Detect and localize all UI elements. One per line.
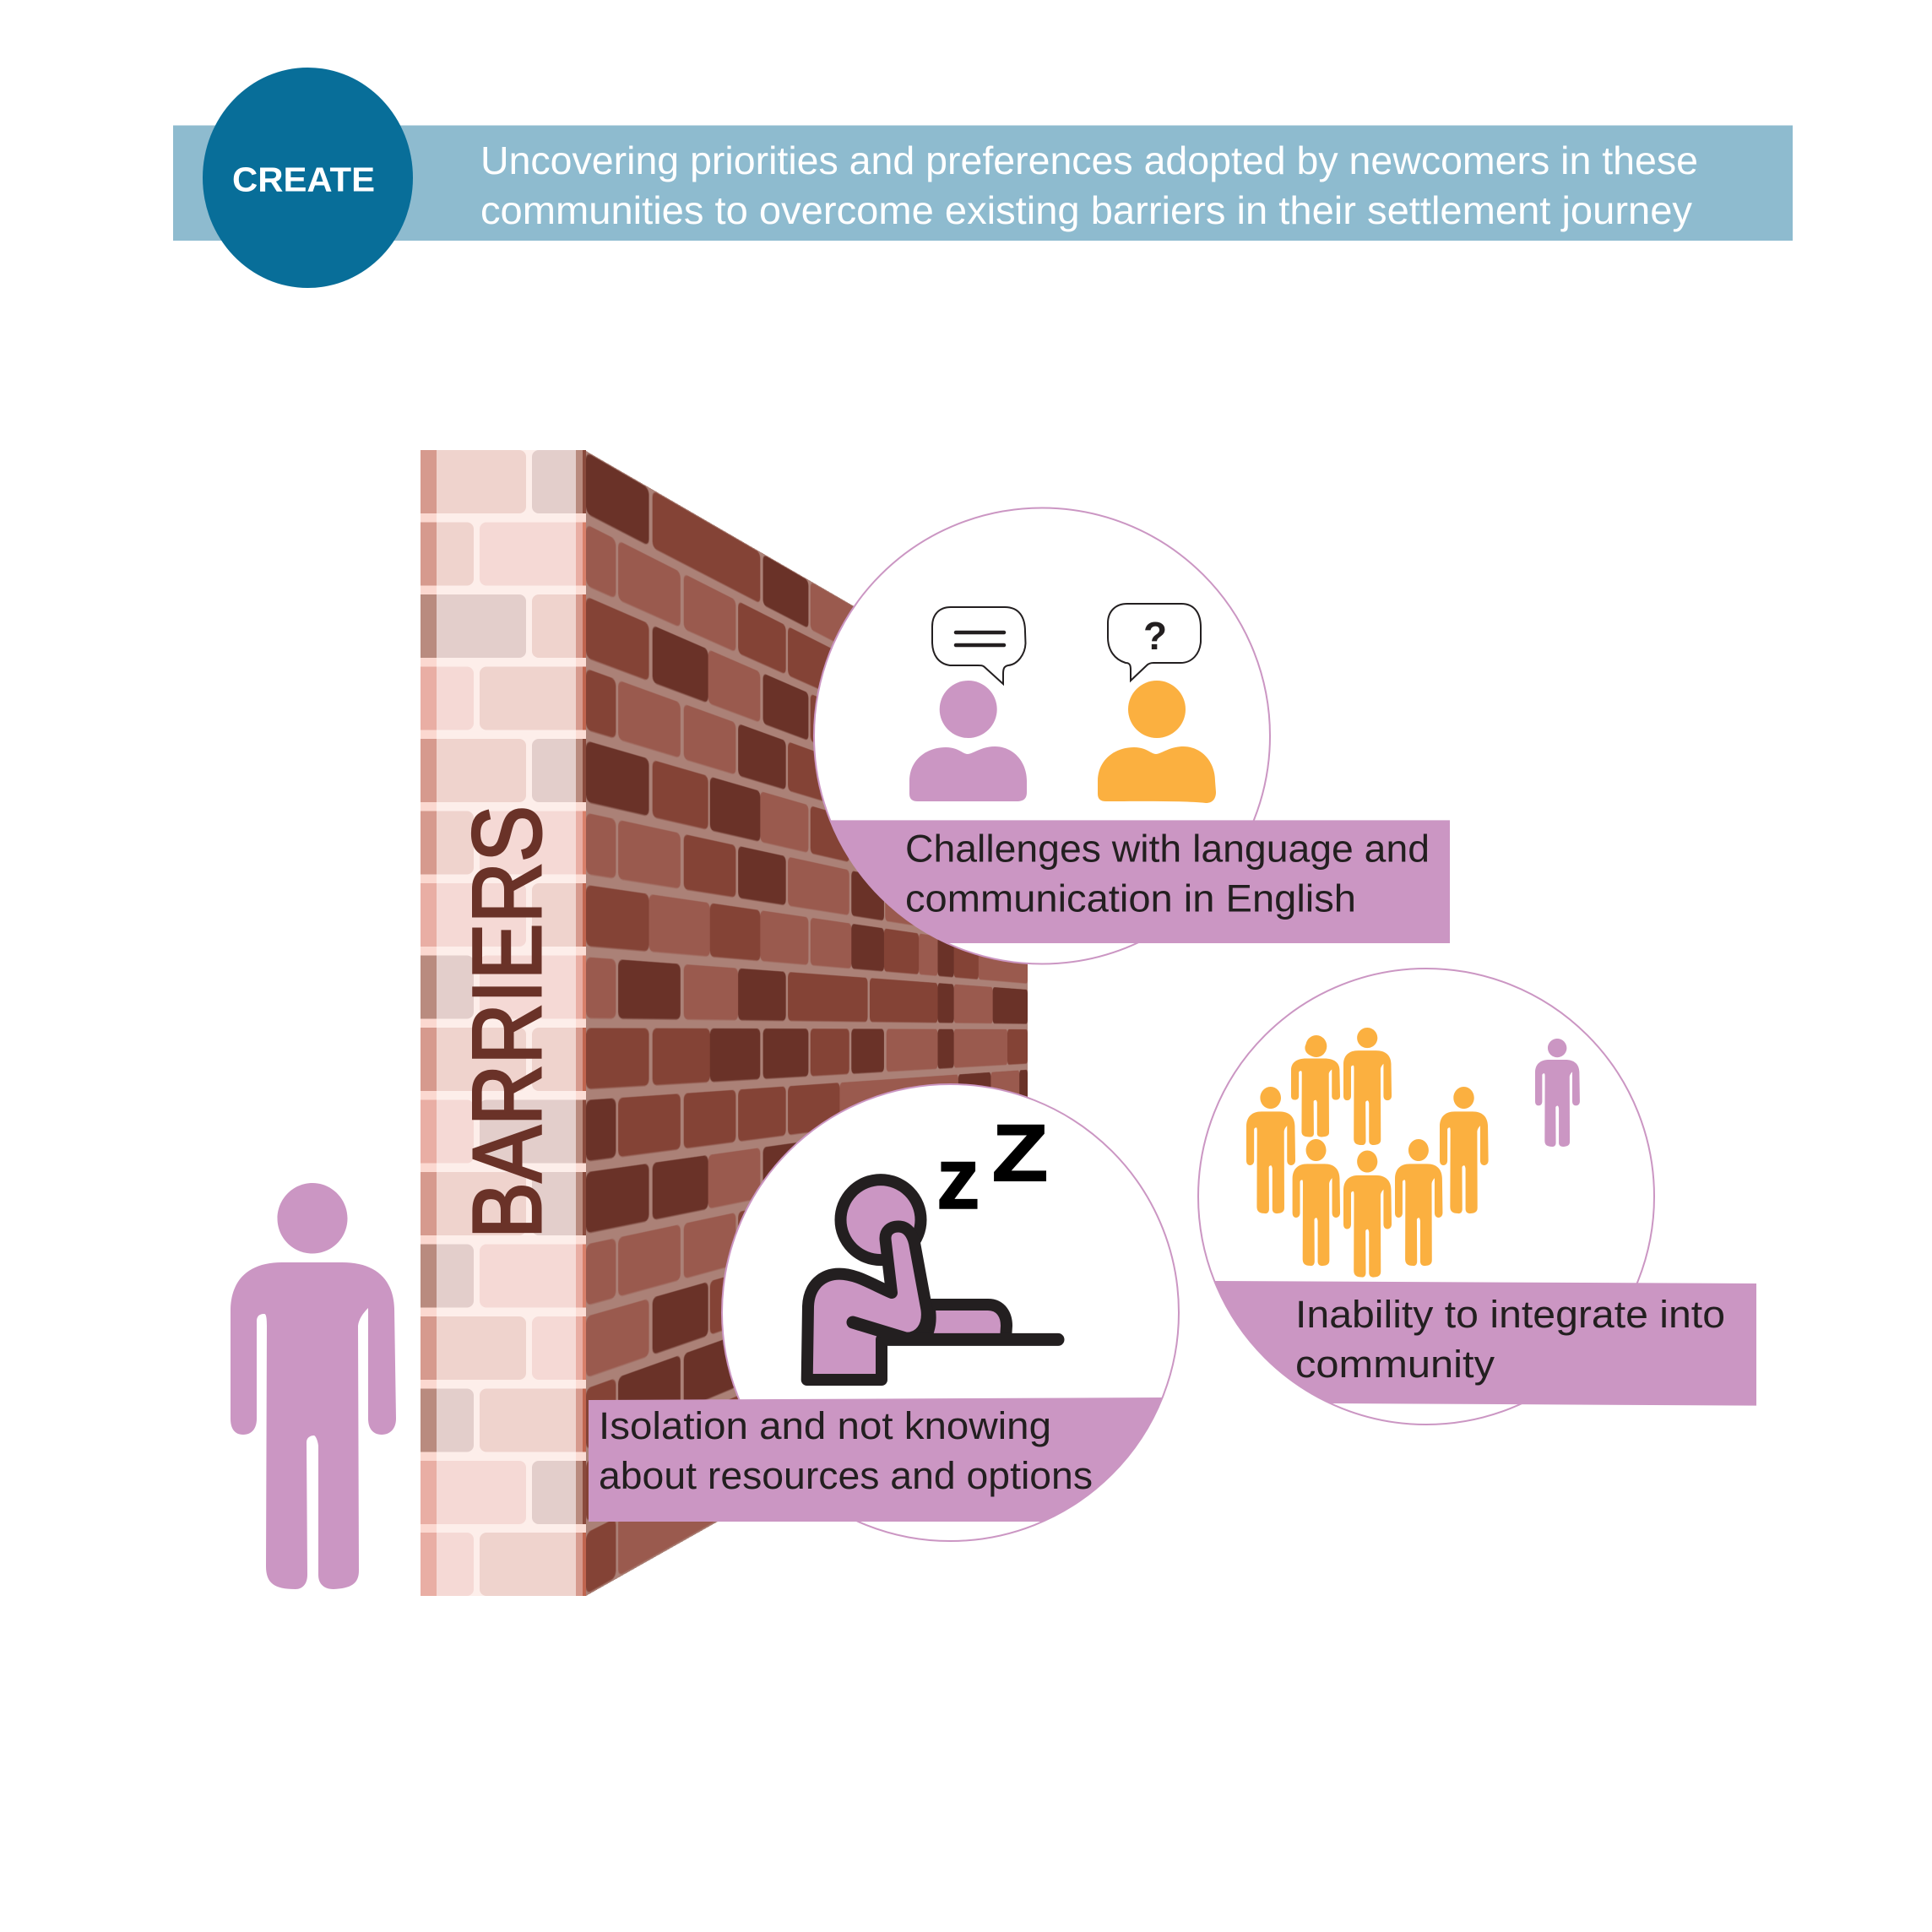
panel circle (814, 508, 1270, 964)
panel caption text (1295, 1293, 1725, 1386)
banner text: Uncovering priorities and preferences adopted by newcomers in these (480, 138, 1698, 182)
icon: sleeping person at desk (807, 1180, 1058, 1380)
panel caption bar (830, 820, 1450, 943)
banner badge circle (203, 68, 413, 288)
panel caption text (599, 1404, 1093, 1497)
icon: speaker with speech bubble (909, 607, 1027, 801)
panel caption text: Challenges with language and (905, 828, 1430, 870)
header banner (173, 68, 1793, 288)
panel caption text: about resources and options (599, 1454, 1093, 1497)
panel caption text: communication in English (905, 876, 1356, 920)
panel caption bar (1214, 1281, 1756, 1406)
panel caption text: Inability to integrate into (1295, 1293, 1725, 1336)
panel caption text: Isolation and not knowing (599, 1404, 1051, 1447)
panel circle (722, 1084, 1179, 1541)
badge label: CREATE (232, 160, 375, 199)
panel: isolation (589, 1084, 1179, 1541)
icon: standing person (231, 1183, 396, 1589)
banner text: communities to overcome existing barriers in their settlement journey (480, 188, 1692, 232)
wall heading: BARRIERS: BARRIERS (453, 806, 562, 1239)
panel: inability to integrate (1198, 969, 1756, 1425)
panel circle (1198, 969, 1654, 1425)
panel caption bar (589, 1397, 1163, 1522)
icon: small z: z (936, 1130, 980, 1227)
banner text (480, 138, 1698, 232)
icon: large Z: Z (992, 1109, 1048, 1198)
brick wall: side face in perspective (586, 451, 1028, 1596)
icon: questioner with speech bubble: ? (1143, 614, 1167, 658)
icon: questioner with speech bubble (1098, 604, 1216, 803)
icon: group of people and one person apart (1246, 1028, 1580, 1278)
panel caption text: community (1295, 1343, 1495, 1386)
panel: language and communication (814, 508, 1450, 964)
panel caption text (905, 828, 1430, 920)
brick wall: front face (421, 450, 586, 1596)
banner bar (173, 125, 1793, 241)
